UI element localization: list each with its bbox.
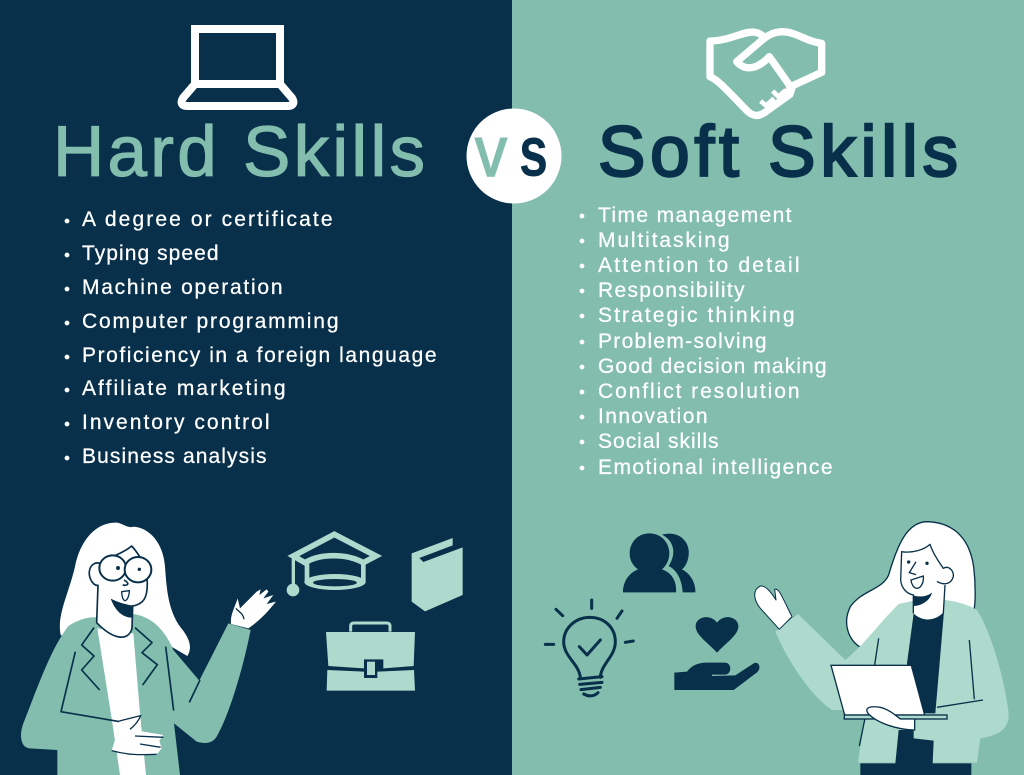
icon: book [412, 538, 463, 611]
eyes [116, 566, 120, 570]
heading: Soft Skills: Soft Skills [598, 113, 958, 192]
waving hand [231, 589, 276, 628]
resting hand [112, 716, 163, 755]
list: soft skills: Social skills [598, 430, 718, 453]
list: soft skills: Innovation [598, 405, 708, 428]
shirt [97, 628, 146, 775]
list: hard skills: Affiliate marketing [82, 377, 286, 400]
panel: hard skills background [0, 0, 512, 775]
icon: laptop [182, 29, 293, 106]
list: soft skills: Attention to detail [598, 254, 800, 277]
top [907, 612, 944, 713]
holding hand [867, 707, 915, 730]
list: hard skills: Business analysis [82, 445, 266, 468]
illustration: woman with glasses [21, 523, 276, 775]
jacket [775, 600, 1009, 763]
jacket lapels and seams [61, 628, 200, 722]
nose and mouth [123, 580, 128, 585]
glasses [99, 555, 151, 582]
icon: light bulb [545, 600, 633, 696]
jacket [21, 614, 251, 775]
hair [847, 522, 975, 647]
raised hand [755, 586, 792, 629]
laptop base [844, 715, 947, 719]
list: soft skills: Problem-solving [598, 330, 766, 353]
neck lines [913, 585, 945, 613]
hair [60, 523, 190, 656]
list: soft skills: Responsibility [598, 279, 745, 302]
icon: handshake [710, 32, 822, 115]
icon: graduation cap [287, 534, 376, 596]
list: hard skills: Computer programming [82, 310, 338, 333]
list: soft skills: Time management [598, 204, 792, 227]
icon: people [623, 533, 695, 592]
trousers [860, 730, 971, 775]
list: hard skills [65, 208, 436, 468]
face [901, 544, 953, 595]
badge: vs: s [519, 113, 548, 192]
list: hard skills: A degree or certificate [82, 208, 332, 231]
list: hard skills: Typing speed [82, 242, 218, 265]
neck [914, 583, 945, 619]
list: hard skills: Proficiency in a foreign language [82, 344, 436, 367]
list: hard skills: Machine operation [82, 276, 282, 299]
laptop screen [831, 665, 925, 715]
list: soft skills: Emotional intelligence [598, 456, 832, 479]
list: soft skills: Good decision making [598, 355, 826, 378]
panel: soft skills background [512, 0, 1024, 775]
badge: vs: v [475, 113, 507, 192]
list: hard skills: Inventory control [82, 411, 270, 434]
icon: heart in hand [674, 617, 759, 690]
list: soft skills [580, 204, 832, 479]
jacket seams [859, 638, 983, 746]
list: soft skills: Conflict resolution [598, 380, 800, 403]
badge: vs [466, 108, 562, 204]
heading: Hard Skills: Hard Skills [53, 113, 425, 192]
icon: briefcase [326, 623, 415, 691]
list: soft skills: Multitasking [598, 229, 730, 252]
illustration: woman with laptop [755, 522, 1009, 775]
face details [909, 562, 916, 575]
list: soft skills: Strategic thinking [598, 304, 794, 327]
face and neck [89, 546, 147, 637]
